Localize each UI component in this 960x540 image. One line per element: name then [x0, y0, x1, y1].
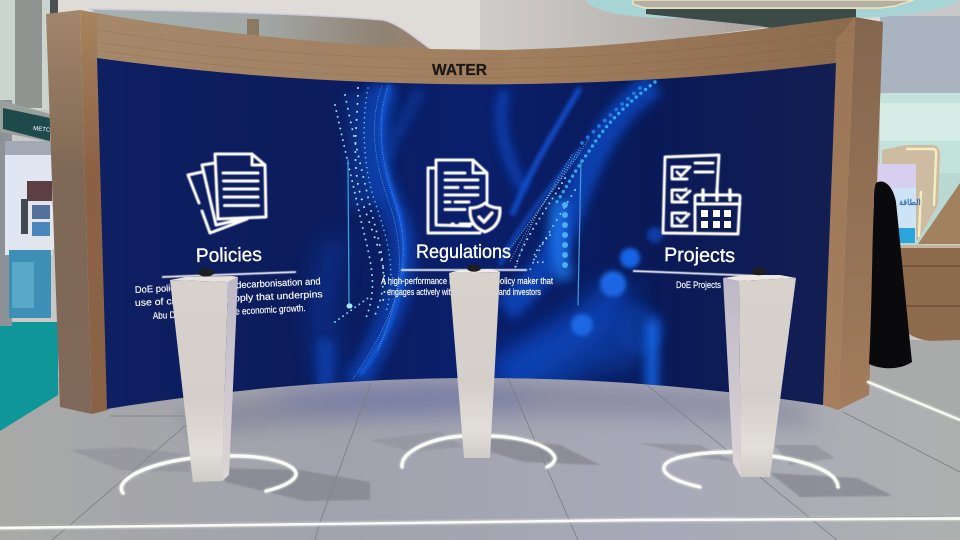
- wood frame: [46, 10, 883, 414]
- glow: left wave: [323, 85, 404, 385]
- left neighbouring booth: [0, 100, 58, 431]
- icon: stacked documents: [188, 154, 266, 233]
- screen vertical light lines: [348, 160, 581, 306]
- text block: Projects description: DoE Projects: [676, 280, 722, 290]
- ring: left: [121, 456, 296, 493]
- kiosk screen: [878, 164, 921, 243]
- column: Policies: [135, 154, 323, 322]
- text block: Policies description: Abu Dhabi's sustainable economic growth.: [153, 303, 306, 322]
- knob: [467, 264, 481, 272]
- glow: upper centre streaks: [385, 88, 580, 215]
- LED screen: [97, 58, 836, 409]
- heading: Projects: Projects: [664, 244, 735, 267]
- booth sign: METC: [33, 126, 51, 134]
- frame: top beam: [97, 13, 855, 90]
- frame: left column inner panel: [80, 10, 108, 414]
- glow: lower right bokeh: [325, 227, 664, 400]
- pedestal: left: [170, 268, 238, 482]
- knob: [198, 268, 214, 276]
- visitor silhouette: [869, 182, 912, 368]
- booth sign: [0, 100, 51, 142]
- floor line: right: [868, 382, 960, 420]
- floor light rings: [0, 382, 960, 528]
- kiosk lights: [907, 149, 936, 236]
- icon: calendar grid: [701, 210, 731, 228]
- glow: right wave: [500, 84, 655, 310]
- rule under Projects: [633, 271, 760, 276]
- floor tile joints: [0, 378, 960, 540]
- rule under Regulations: [401, 269, 527, 271]
- kiosk screen: الطاقة: [899, 198, 921, 207]
- text block: Policies description: [135, 276, 323, 322]
- icon: checklist and calendar: [663, 155, 740, 234]
- heading: Policies: Policies: [196, 244, 262, 267]
- floor: [0, 340, 960, 540]
- water sign: WATER: [432, 62, 487, 79]
- ceiling curve behind frame: [90, 9, 432, 50]
- column: Projects: [633, 155, 760, 290]
- text block: Regulations description: [381, 276, 553, 297]
- floor line: front: [0, 518, 960, 528]
- pedestal shadows: [70, 432, 893, 501]
- text block: Regulations description: A high-performance regulator and policy maker that: [381, 276, 553, 286]
- column: Regulations: [381, 160, 553, 297]
- text block: Policies description: DoE policies are driving decarbonisation and: [135, 276, 321, 296]
- particles: left wave: [335, 86, 403, 380]
- particles: right wave: [505, 82, 655, 275]
- knob: [751, 268, 767, 275]
- ring: right: [664, 452, 838, 487]
- text block: Policies description: use of clean water supply that underpins: [135, 289, 323, 309]
- pedestal: centre: [449, 264, 500, 458]
- ring: centre: [402, 436, 555, 467]
- background: hall walls and ceiling: [0, 0, 960, 400]
- text block: Regulations description: engages actively with stakeholders and investors: [387, 287, 541, 297]
- frame: right column outer panel: [838, 17, 883, 410]
- right background: kiosk, cabinet and visitor: [869, 145, 960, 368]
- screen artwork: blue waves and particles: [323, 82, 664, 400]
- ceiling light ring: [585, 0, 960, 28]
- heading: Regulations: Regulations: [416, 241, 511, 263]
- rule under Policies: [162, 272, 296, 277]
- icon: document with shield: [428, 160, 500, 233]
- ceiling post: [247, 19, 259, 36]
- kiosk: [880, 145, 940, 240]
- wooden cabinet: [898, 245, 960, 341]
- pedestal: right: [723, 268, 796, 477]
- frame: right column inner panel: [823, 17, 855, 410]
- frame: left column outer panel: [46, 10, 92, 414]
